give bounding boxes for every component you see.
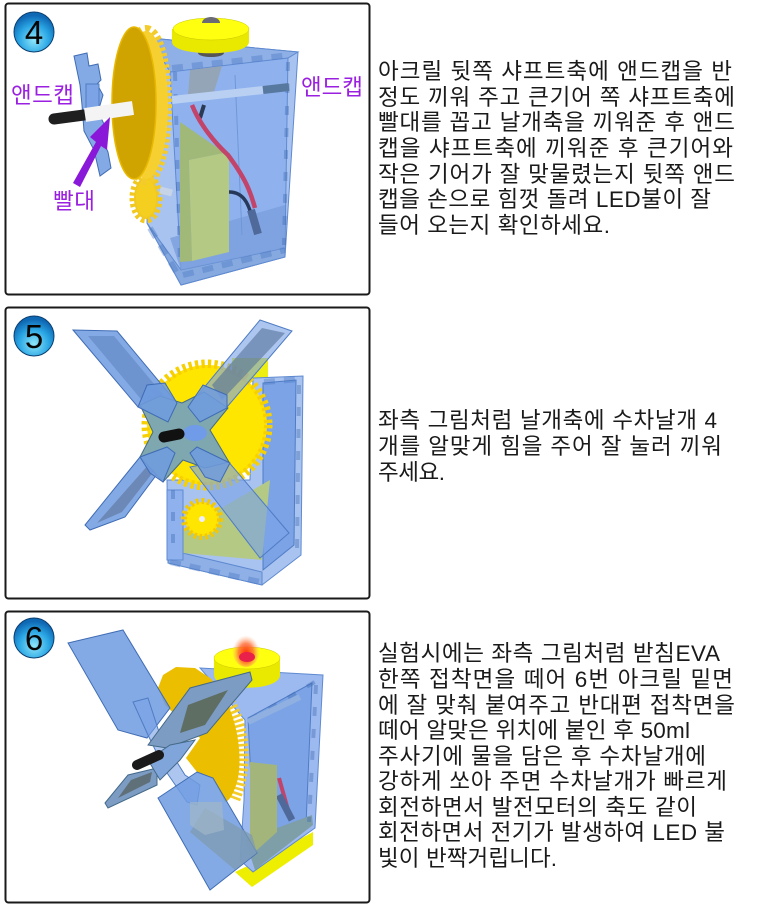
text block: step 6 instructions: 강하게 쏘아 주면 수차날개가 빠르게 — [378, 769, 727, 794]
illustration: LED cylinder — [232, 358, 268, 382]
text block: step 4 instructions — [378, 59, 735, 238]
illustration: shaft — [248, 697, 300, 722]
text block: step 6 instructions: 에 잘 맞춰 붙여주고 반대편 접착면을 — [378, 693, 735, 718]
text block: step 6 instructions: 실험시에는 좌측 그림처럼 받침EVA — [378, 641, 720, 666]
illustration: small gear — [185, 502, 219, 536]
text block: step 5 instructions: 좌측 그림처럼 날개축에 수차날개 4 — [378, 408, 717, 433]
text block: step 6 instructions: 회전하면서 전기가 발생하여 LED 불 — [378, 820, 725, 845]
panel: step 4 illustration — [6, 4, 370, 294]
illustration: battery block — [250, 762, 277, 850]
badge: number 4 — [14, 12, 54, 52]
text block: step 5 instructions: 개를 알맞게 힘을 주어 잘 눌러 끼워 — [378, 434, 722, 459]
text block: step 4 instructions: 캡을 손으로 힘껏 돌려 LED불이 잘 — [378, 187, 711, 212]
illustration: black rod — [54, 115, 84, 119]
illustration: shaft — [172, 87, 289, 100]
text block: step 6 instructions — [378, 641, 735, 871]
badge: number 6 — [14, 618, 54, 658]
badge: number 5 — [14, 316, 54, 356]
illustration: black rod — [137, 755, 159, 765]
arrow: purple straw pointer — [73, 117, 110, 187]
illustration: LED cylinder — [214, 647, 280, 688]
text block: step 5 instructions — [378, 408, 722, 485]
illustration: small gear — [134, 177, 172, 219]
illustration: LED cylinder — [172, 17, 249, 57]
badge: number 5: 5 — [25, 318, 43, 355]
badge: number 4: 4 — [25, 14, 43, 51]
illustration: acrylic box — [147, 38, 298, 285]
illustration: straw — [85, 108, 133, 115]
label: straw: 빨대 — [53, 189, 95, 214]
illustration: wires — [279, 778, 292, 820]
illustration: end cap — [74, 53, 111, 176]
illustration: large gear — [147, 365, 267, 485]
text block: step 6 instructions: 한쪽 접착면을 떼어 6번 아크릴 밑면 — [378, 667, 733, 692]
text block: step 4 instructions: 들어 오는지 확인하세요. — [378, 213, 610, 238]
label: right end cap: 앤드캡 — [301, 75, 363, 100]
text block: step 4 instructions: 정도 끼워 주고 큰기어 쪽 샤프트축에 — [378, 85, 735, 110]
illustration: LED glow — [232, 631, 260, 667]
illustration: water wheel blades — [68, 630, 257, 890]
illustration: large gear — [112, 27, 168, 179]
illustration: battery block — [180, 122, 229, 262]
illustration: acrylic box — [167, 376, 303, 585]
text block: step 4 instructions: 아크릴 뒷쪽 샤프트축에 앤드캡을 반 — [378, 59, 732, 84]
illustration: wires — [192, 105, 258, 234]
text block: step 4 instructions: 작은 기어가 잘 맞물렸는지 뒷쪽 앤드 — [378, 162, 735, 187]
illustration: wheel hub — [138, 383, 230, 482]
illustration: water wheel blades — [73, 320, 292, 558]
illustration: acrylic box — [200, 668, 323, 872]
illustration: yellow base pad — [235, 832, 313, 887]
panel: step 5 illustration — [6, 308, 370, 598]
text block: step 6 instructions: 회전하면서 발전모터의 축도 같이 — [378, 795, 697, 820]
text block: step 4 instructions: 빨대를 꼽고 날개축을 끼워준 후 앤드 — [378, 110, 735, 135]
illustration: large gear — [158, 667, 241, 802]
text block: step 6 instructions: 떼어 알맞은 위치에 붙인 후 50ml — [378, 718, 690, 743]
text block: step 6 instructions: 빛이 반짝거립니다. — [378, 846, 557, 871]
text block: step 5 instructions: 주세요. — [378, 460, 445, 485]
panel: step 6 illustration — [6, 612, 370, 902]
text block: step 4 instructions: 캡을 샤프트축에 끼워준 후 큰기어와 — [378, 136, 733, 161]
text block: step 6 instructions: 주사기에 물을 담은 후 수차날개에 — [378, 744, 706, 769]
badge: number 6: 6 — [25, 620, 43, 657]
label: left end cap: 앤드캡 — [11, 83, 74, 108]
